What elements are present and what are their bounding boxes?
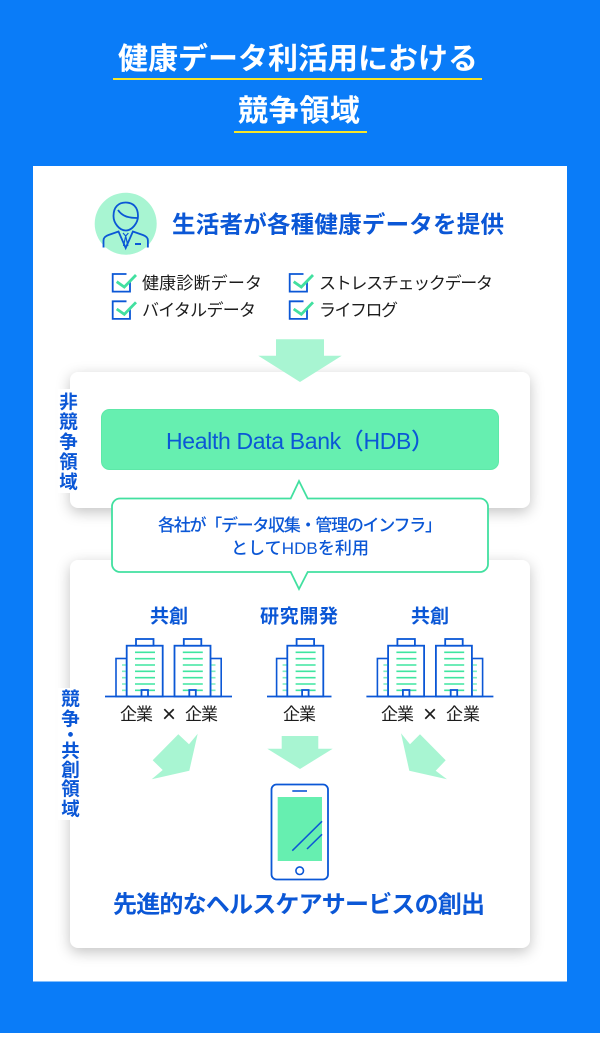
group: research and development — [260, 606, 338, 724]
white main panel — [33, 166, 567, 982]
arrow: center down — [267, 736, 333, 769]
checklist: 健康診断データ — [142, 273, 262, 293]
group: research and development: 研究開発 — [260, 606, 338, 628]
label: non-competitive: 競 — [59, 412, 78, 432]
label: competitive and co-creation: ・ — [61, 724, 80, 746]
title: 競争領域 — [238, 95, 360, 128]
arrow: down to HDB — [258, 339, 342, 382]
group: co-creation right — [366, 606, 493, 728]
group: co-creation left: × — [162, 701, 176, 728]
heading: 生活者が各種健康データを提供 — [172, 210, 504, 238]
group: co-creation right: 共創 — [411, 606, 449, 628]
label: competitive and co-creation: 領 — [61, 778, 80, 800]
Health Data Bank box — [102, 410, 498, 470]
checklist: バイタルデータ — [142, 300, 256, 320]
arrow: left diagonal — [152, 734, 198, 779]
group: co-creation left — [105, 606, 232, 728]
icon: person in suit — [95, 193, 157, 255]
conclusion text: 先進的なヘルスケアサービスの創出 — [113, 892, 485, 918]
group: co-creation left: 企業 — [185, 705, 218, 724]
group: co-creation right: 企業 — [446, 705, 480, 724]
icon: smartphone — [272, 784, 328, 880]
label: non-competitive: 争 — [59, 432, 78, 452]
panel: non-competitive area — [58, 339, 530, 508]
panel: data provider — [95, 193, 504, 320]
checklist — [113, 273, 493, 320]
label: non-competitive: 領 — [59, 452, 78, 472]
group: co-creation right: × — [423, 701, 437, 728]
Health Data Bank box: Health Data Bank（HDB） — [166, 428, 434, 454]
label: competitive and co-creation: 競 — [61, 688, 80, 710]
label: competitive and co-creation: 創 — [61, 760, 80, 780]
group: co-creation left: 企業 — [120, 705, 153, 724]
checklist: ライフログ — [319, 301, 398, 320]
title: 健康データ利活用における — [118, 42, 478, 76]
group: co-creation left: 共創 — [150, 606, 188, 628]
label: competitive and co-creation: 域 — [61, 798, 80, 820]
label: non-competitive — [59, 392, 78, 492]
title — [113, 42, 482, 133]
group: co-creation right: 企業 — [381, 705, 414, 724]
callout: HDB use: としてHDBを利用 — [231, 539, 369, 558]
group: research and development: 企業 — [283, 705, 316, 724]
panel: competitive and co-creation area — [58, 560, 530, 948]
callout: HDB use: 各社が「データ収集・管理のインフラ」 — [158, 515, 442, 535]
checklist: ストレスチェックデータ — [319, 273, 493, 293]
label: competitive and co-creation — [61, 688, 80, 820]
arrow: right diagonal — [401, 733, 447, 779]
label: competitive and co-creation: 争 — [61, 708, 80, 730]
label: competitive and co-creation: 共 — [61, 740, 80, 762]
label: non-competitive: 非 — [59, 392, 78, 412]
label: non-competitive: 域 — [59, 472, 78, 492]
callout: HDB use — [112, 481, 488, 589]
